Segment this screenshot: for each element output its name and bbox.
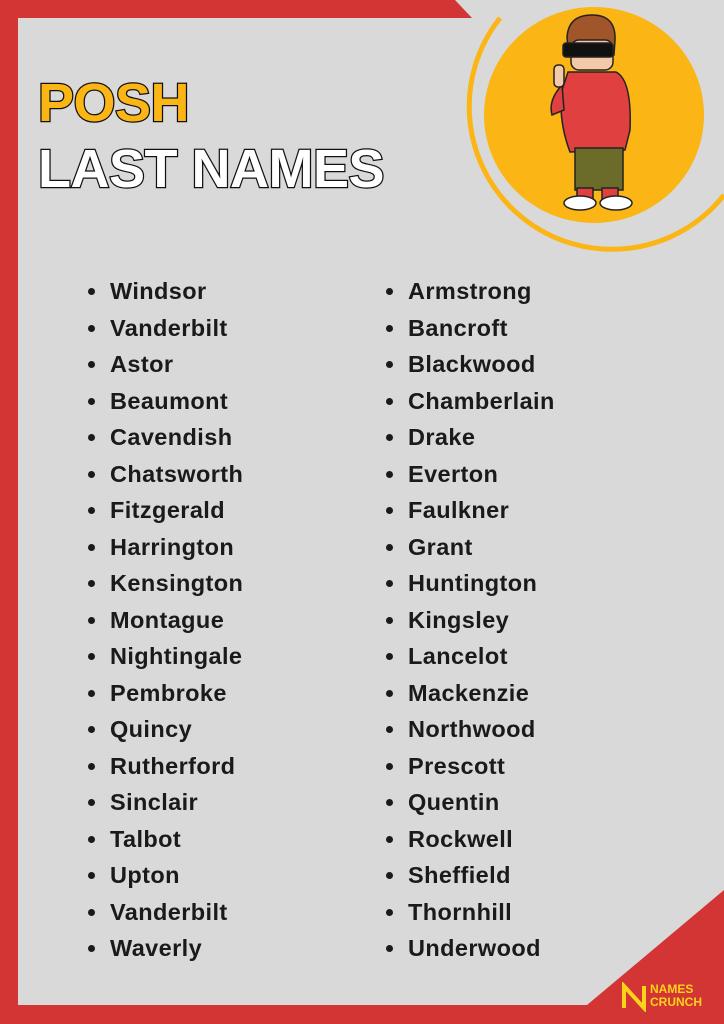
logo: Names Crunch: CRUNCH <box>650 995 702 1009</box>
title: POSH: POSH <box>38 73 189 133</box>
list: left column: Montague <box>110 606 224 632</box>
list: right column: Chamberlain <box>408 388 555 414</box>
list: left column: Pembroke <box>110 680 227 706</box>
list: right column: Rockwell <box>408 826 513 852</box>
logo: Names Crunch <box>622 982 702 1012</box>
list: left column: Astor <box>110 351 173 377</box>
list: left column: Vanderbilt <box>110 314 228 340</box>
list: left column: Beaumont <box>110 388 228 414</box>
list: left column: Fitzgerald <box>110 497 225 523</box>
list: left column: Waverly <box>110 935 202 961</box>
list: right column: Blackwood <box>408 351 536 377</box>
logo: Names Crunch: NAMES <box>650 982 693 996</box>
list: right column: Quentin <box>408 789 500 815</box>
list: left column: Rutherford <box>110 752 235 778</box>
list: right column: Kingsley <box>408 606 509 632</box>
list: left column: Quincy <box>110 716 192 742</box>
list: right column: Sheffield <box>408 862 511 888</box>
list: left column: Harrington <box>110 534 234 560</box>
list: right column: Faulkner <box>408 497 509 523</box>
list: left column: Sinclair <box>110 789 198 815</box>
list: right column: Lancelot <box>408 643 508 669</box>
list: left column: Kensington <box>110 570 243 596</box>
list: left column: Chatsworth <box>110 460 243 486</box>
list: right column: Drake <box>408 424 475 450</box>
title: LAST NAMES: LAST NAMES <box>38 139 384 199</box>
list: left column: Vanderbilt <box>110 898 228 924</box>
list: right column <box>386 278 555 961</box>
list: right column: Northwood <box>408 716 536 742</box>
list: right column: Grant <box>408 534 473 560</box>
list: right column: Bancroft <box>408 314 508 340</box>
list: right column: Underwood <box>408 935 541 961</box>
illustration: character in yellow circle <box>466 7 724 252</box>
character <box>551 15 632 210</box>
list: left column: Talbot <box>110 826 181 852</box>
list: left column <box>88 278 243 961</box>
list: right column: Thornhill <box>408 898 512 924</box>
list: right column: Prescott <box>408 752 505 778</box>
list: right column: Armstrong <box>408 278 532 304</box>
list: right column: Huntington <box>408 570 537 596</box>
list: left column: Windsor <box>110 278 207 304</box>
list: left column: Upton <box>110 862 180 888</box>
list: right column: Everton <box>408 460 498 486</box>
list: left column: Cavendish <box>110 424 232 450</box>
list: right column: Mackenzie <box>408 680 529 706</box>
list: left column: Nightingale <box>110 643 242 669</box>
